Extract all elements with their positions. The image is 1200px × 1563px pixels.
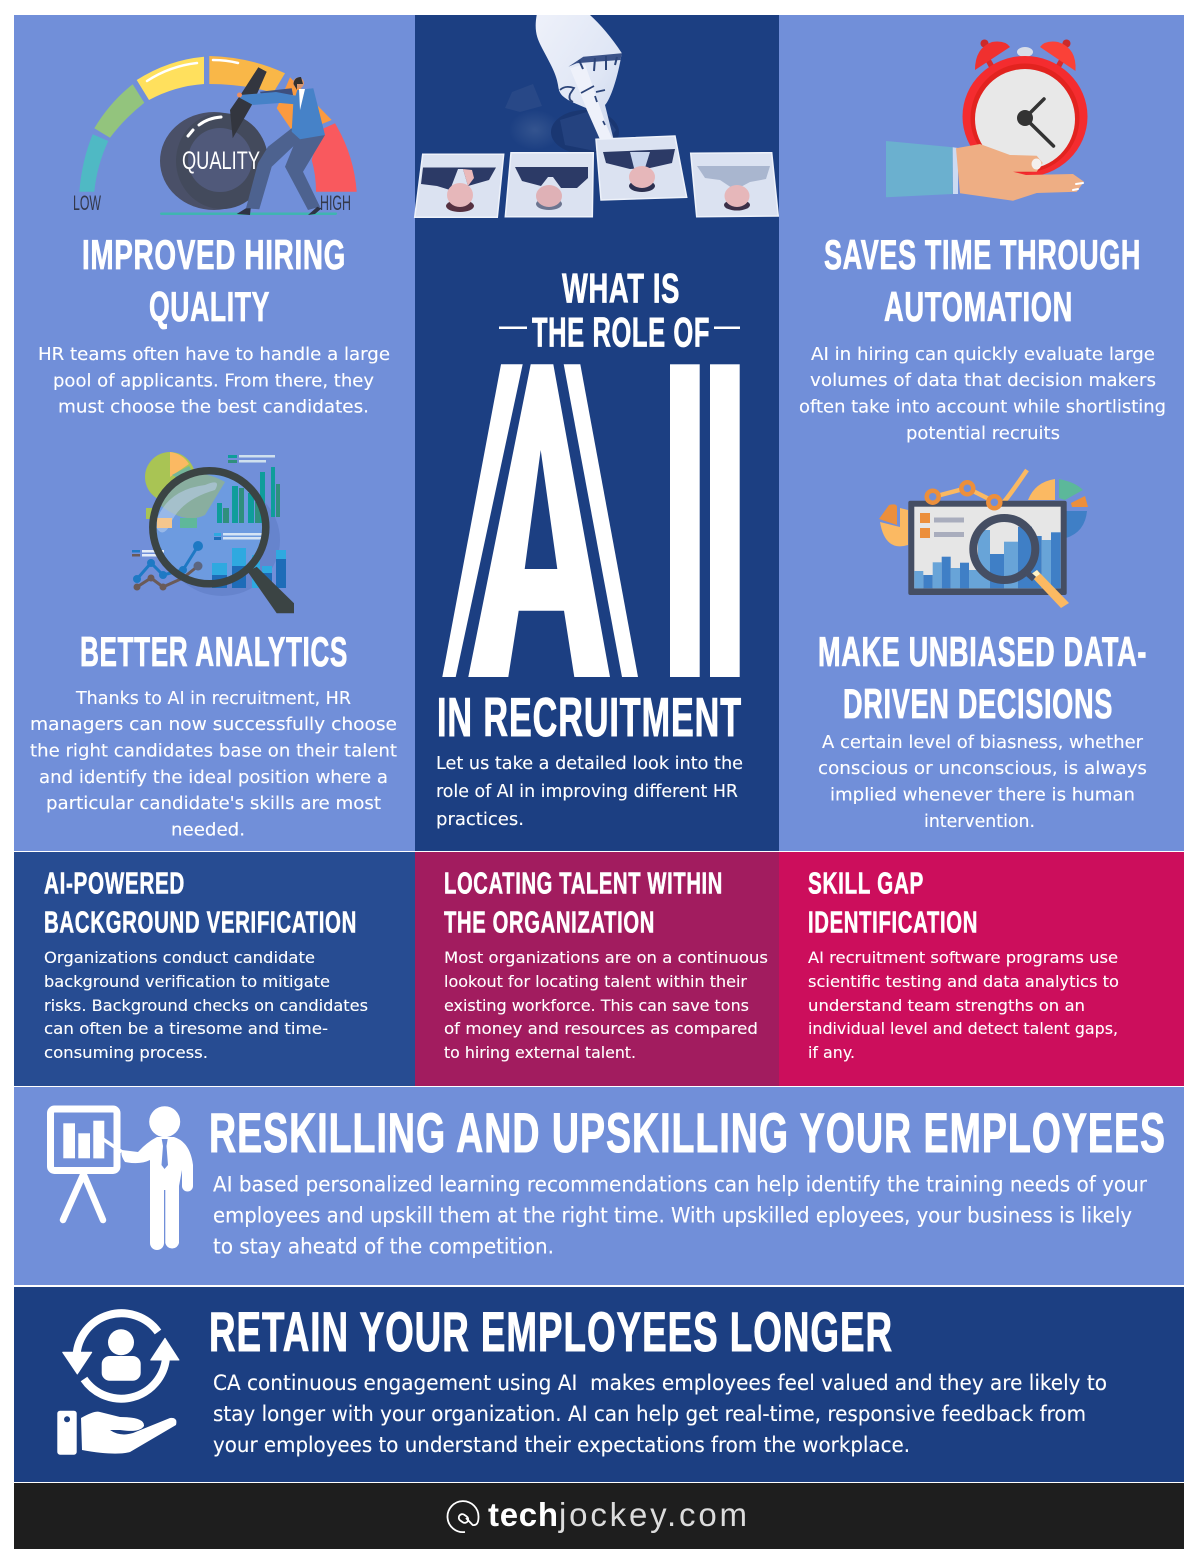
text: better analytics body: Thanks to AI in recruitment, HR [75,688,351,709]
text: better analytics body: needed. [171,820,245,840]
heading: locating talent within the organization: LOCATING TALENT WITHIN [444,866,723,900]
text: retain employees body: your employees to understand their expectations from the workplace. [213,1433,910,1458]
icon: quality gauge with man pushing dial [73,56,357,215]
heading: skill gap identification: SKILL GAP [808,866,924,900]
text: retain employees body [213,1371,1107,1458]
text: saves time body: volumes of data that decision makers [810,370,1156,391]
heading: large AI lettering [442,364,740,677]
heading: AI-powered background verification: AI-POWERED [44,866,185,900]
icon: presenter at chart board [50,1106,193,1250]
panel: left column [14,15,415,851]
heading: skill gap identification: IDENTIFICATION [808,904,978,940]
text: reskilling body [213,1172,1147,1260]
text: background verification body: consuming process. [44,1043,208,1062]
heading: saves time through automation [824,231,1141,330]
image: candidate photo 4 [691,153,778,217]
icon: magnifier over charts [132,452,294,613]
text: skill gap body: AI recruitment software programs use [808,948,1118,967]
text: locating talent body: Most organizations are on a continuous [444,948,768,967]
text: better analytics body: and identify the ideal position where a [39,767,388,788]
heading: improved hiring quality: IMPROVED HIRING [82,231,346,278]
panel: right column [779,15,1184,851]
heading: in recruitment: IN RECRUITMENT [437,686,742,748]
heading: locating talent within the organization [444,866,723,940]
image: candidate photo 3 [596,136,687,200]
icon: quality gauge with man pushing dial: HIGH [320,192,351,215]
text: saves time body: AI in hiring can quickly evaluate large [811,344,1155,365]
heading: make unbiased data-driven decisions [818,628,1147,727]
panel: centre column [415,15,779,851]
panel: locating talent [415,852,779,1086]
text: improved hiring quality body [38,344,390,418]
text: locating talent body: of money and resources as compared [444,1019,758,1038]
text: skill gap body [808,948,1119,1062]
heading: what is the role of [499,264,740,356]
text: retain employees body: CA continuous engagement using AI makes employees feel valued and they are likely to [213,1371,1107,1396]
icon: quality gauge with man pushing dial: QUALITY [182,147,260,175]
text: saves time body: often take into account while shortlisting [799,396,1166,418]
text: reskilling body: to stay aheatd of the competition. [213,1234,554,1260]
image: candidate photo 2 [505,153,593,217]
panel: background verification [14,852,415,1086]
text: skill gap body: if any. [808,1043,855,1062]
heading: AI-powered background verification: BACKGROUND VERIFICATION [44,904,357,940]
text: background verification body: can often be a tiresome and time- [44,1019,328,1038]
text: locating talent body: existing workforce. This can save tons [444,996,749,1015]
text: better analytics body: particular candidate's skills are most [46,793,381,814]
text: locating talent body: lookout for locating talent within their [444,972,747,991]
text: improved hiring quality body: pool of applicants. From there, they [53,370,374,392]
text: background verification body: Organizations conduct candidate [44,948,315,967]
text: unbiased decisions body: implied whenever there is human [830,784,1135,806]
text: better analytics body: managers can now successfully choose [30,714,397,735]
text: centre introduction: Let us take a detailed look into the [436,753,743,774]
icon: quality gauge with man pushing dial: LOW [73,192,101,215]
heading: locating talent within the organization: THE ORGANIZATION [444,904,655,940]
logo text: techjockey.com: jockey.com [558,1496,747,1533]
text: saves time body: potential recruits [906,423,1060,444]
text: saves time body [799,344,1166,444]
icon: dashboard with magnifier [879,470,1088,608]
text: improved hiring quality body: must choose the best candidates. [58,396,369,418]
text: unbiased decisions body: conscious or unconscious, is always [818,758,1147,779]
text: reskilling body: employees and upskill them at the right time. With upskilled eployees, your business is likely [213,1204,1132,1228]
text: skill gap body: understand team strengths on an [808,996,1085,1015]
text: better analytics body: the right candidates base on their talent [30,740,397,762]
text: better analytics body [30,688,397,840]
text: background verification body: risks. Background checks on candidates [44,996,368,1015]
text: improved hiring quality body: HR teams often have to handle a large [38,344,390,365]
heading: improved hiring quality [82,231,346,330]
heading: skill gap identification [808,866,978,940]
heading: better analytics: BETTER ANALYTICS [80,628,348,675]
panel: skill gap [779,852,1184,1086]
heading: what is the role of: THE ROLE OF [532,308,710,356]
text: reskilling body: AI based personalized learning recommendations can help identify the training needs of your [213,1172,1147,1198]
text: unbiased decisions body [818,732,1147,832]
text: skill gap body: individual level and detect talent gaps, [808,1019,1118,1038]
text: centre introduction: role of AI in improving different HR [436,781,738,802]
text: skill gap body: scientific testing and data analytics to [808,972,1119,991]
icon: techjockey at symbol [448,1501,479,1532]
heading: what is the role of: WHAT IS [562,264,680,312]
text: centre introduction [436,753,743,830]
panel: reskilling and upskilling [14,1087,1184,1285]
text: background verification body: background verification to mitigate [44,972,330,991]
text: unbiased decisions body: A certain level of biasness, whether [822,732,1144,753]
heading: improved hiring quality: QUALITY [149,283,270,330]
image: candidate photo 1 [415,154,504,217]
heading: AI-powered background verification [44,866,357,940]
text: background verification body [44,948,368,1062]
text: retain employees body: stay longer with your organization. AI can help get real-time, responsive feedback from [213,1402,1086,1427]
image: robot hand choosing candidate photo [415,15,778,217]
panel: footer [14,1483,1184,1549]
text: locating talent body: to hiring external talent. [444,1043,636,1062]
logo text: techjockey.com: tech [488,1496,558,1533]
text: unbiased decisions body: intervention. [924,811,1035,832]
icon: hand holding person with circular arrows [57,1313,179,1455]
panel: retain employees [14,1287,1184,1482]
text: centre introduction: practices. [436,809,524,830]
text: locating talent body [444,948,768,1062]
heading: saves time through automation: AUTOMATION [884,283,1073,330]
icon: hand holding alarm clock [886,40,1088,201]
